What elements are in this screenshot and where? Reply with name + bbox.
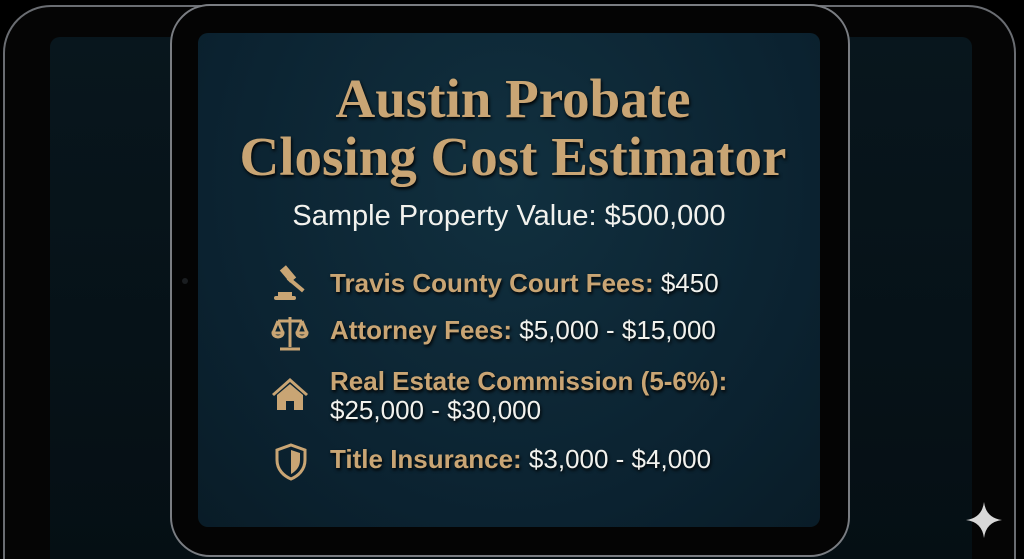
camera dot [182, 278, 188, 284]
item: court fees: Travis County Court Fees: $450 [330, 268, 719, 298]
subtitle: Sample Property Value: $500,000 [292, 200, 726, 232]
icon: house [272, 378, 308, 410]
item: real estate commission: $25,000 - $30,000 [330, 395, 541, 425]
title [240, 68, 788, 190]
icon: shield [276, 443, 306, 481]
title: Closing Cost Estimator [240, 126, 786, 187]
item: title insurance: Title Insurance: $3,000 - $4,000 [330, 444, 711, 474]
icon: sparkle [966, 502, 1002, 538]
item: real estate commission: Real Estate Commission (5-6%): [330, 366, 727, 396]
item: real estate commission [330, 366, 727, 425]
title: Austin Probate [336, 68, 690, 129]
icon: gavel [274, 265, 304, 300]
screen [198, 33, 820, 527]
front tablet [170, 4, 850, 557]
item: attorney fees: Attorney Fees: $5,000 - $15,000 [330, 315, 716, 345]
icon: scales [272, 317, 308, 350]
